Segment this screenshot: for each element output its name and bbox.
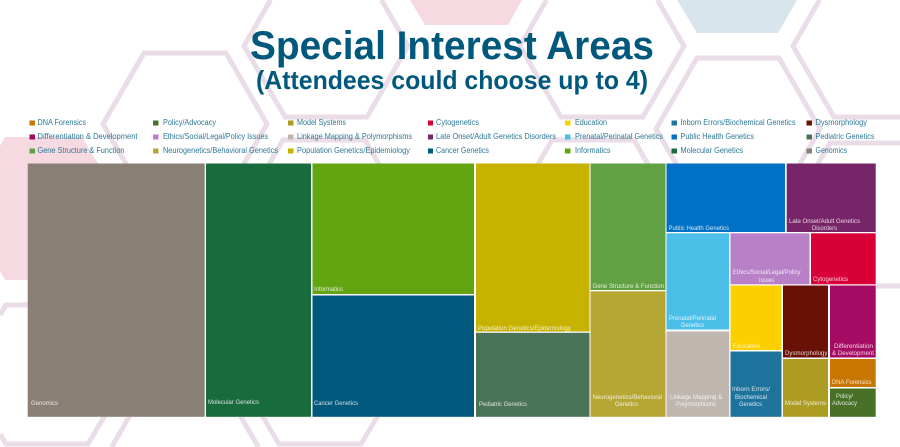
cell: Cancer Genetics xyxy=(312,296,474,417)
legend: Population Genetics/Epidemiology xyxy=(297,146,410,155)
legend xyxy=(30,118,875,155)
cell: Population Genetics/Epidemiology xyxy=(476,164,590,332)
cell: Informatics: Informatics xyxy=(314,286,344,293)
treemap chart xyxy=(28,164,876,417)
cell: Inborn Errors/Biochemical Genetics: Biochemical xyxy=(735,394,768,401)
cell: Inborn Errors/Biochemical Genetics xyxy=(730,352,782,417)
cell: Ethics/Social/Legal/Policy Issues: Issues xyxy=(759,277,775,284)
legend: Policy/Advocacy xyxy=(163,118,216,127)
cell: Linkage Mapping & Polymorphisms xyxy=(666,332,729,417)
cell: Policy/Advocacy: Policy/ xyxy=(836,393,853,400)
subtitle: (Attendees could choose up to 4) xyxy=(256,65,648,95)
cell: Genomics xyxy=(28,164,205,417)
cell: Late Onset/Adult Genetics Disorders xyxy=(787,164,876,232)
cell: Inborn Errors/Biochemical Genetics: Inborn Errors/ xyxy=(732,386,770,393)
legend: Differentiation & Development xyxy=(38,132,138,141)
legend: Gene Structure & Function xyxy=(38,146,124,155)
cell: Public Health Genetics xyxy=(666,164,785,232)
cell: Model Systems: Model Systems xyxy=(785,400,827,407)
cell: Cancer Genetics: Cancer Genetics xyxy=(314,400,359,407)
cell: Genomics: Genomics xyxy=(31,400,59,407)
cell: Cytogenetics: Cytogenetics xyxy=(813,276,849,283)
cell: Molecular Genetics xyxy=(206,164,311,417)
cell: Neurogenetics/Behavioral Genetics: Genetics xyxy=(615,401,639,408)
legend: Public Health Genetics xyxy=(680,132,754,141)
cell: Public Health Genetics: Public Health Genetics xyxy=(668,225,730,232)
cell: Differentiation & Development: & Development xyxy=(832,350,874,357)
cell: Cytogenetics xyxy=(811,233,876,284)
legend: Prenatal/Perinatal Genetics xyxy=(575,132,663,141)
cell: Linkage Mapping & Polymorphisms: Linkage Mapping & xyxy=(670,394,723,401)
cell: Differentiation & Development: Differentiation xyxy=(834,343,873,350)
cell: Gene Structure & Function: Gene Structure & Function xyxy=(592,283,664,290)
cell: Population Genetics/Epidemiology: Population Genetics/Epidemiology xyxy=(478,325,572,332)
cell: DNA Forensics xyxy=(830,359,876,387)
cell: Neurogenetics/Behavioral Genetics xyxy=(590,291,666,417)
cell: Education xyxy=(730,286,782,350)
cell: Ethics/Social/Legal/Policy Issues xyxy=(730,233,810,284)
cell: Informatics xyxy=(312,164,474,294)
cell: Late Onset/Adult Genetics Disorders: Late Onset/Adult Genetics xyxy=(789,218,861,225)
legend: Neurogenetics/Behavioral Genetics xyxy=(163,146,278,155)
cell: Dysmorphology: Dysmorphology xyxy=(785,350,828,357)
cell: Education: Education xyxy=(733,343,760,350)
cell: Dysmorphology xyxy=(783,286,828,358)
cell: Prenatal/Perinatal Genetics: Prenatal/Perinatal xyxy=(669,315,717,322)
legend: Education xyxy=(575,118,607,127)
cell: Neurogenetics/Behavioral Genetics: Neurogenetics/Behavioral xyxy=(592,394,663,401)
cell: Differentiation & Development xyxy=(830,286,876,358)
legend: DNA Forensics xyxy=(38,118,86,127)
cell: Pediatric Genetics: Pediatric Genetics xyxy=(479,401,528,408)
cell: Gene Structure & Function xyxy=(590,164,666,290)
legend: Model Systems xyxy=(297,118,346,127)
cell: Inborn Errors/Biochemical Genetics: Genetics xyxy=(739,401,763,408)
cell: Prenatal/Perinatal Genetics: Genetics xyxy=(681,322,705,329)
legend: Informatics xyxy=(575,146,611,155)
cell: Model Systems xyxy=(783,359,828,417)
legend: Cancer Genetics xyxy=(436,146,489,155)
legend: Late Onset/Adult Genetics Disorders xyxy=(436,132,556,141)
cell: Policy/Advocacy: Advocacy xyxy=(832,400,858,407)
legend: Ethics/Social/Legal/Policy Issues xyxy=(163,132,268,141)
title: Special Interest Areas xyxy=(250,24,654,68)
cell: Prenatal/Perinatal Genetics xyxy=(666,233,729,330)
cell: Molecular Genetics: Molecular Genetics xyxy=(208,399,260,406)
cell: Policy/Advocacy xyxy=(830,388,876,417)
legend: Dysmorphology xyxy=(816,118,867,127)
legend: Pediatric Genetics xyxy=(816,132,875,141)
legend: Genomics xyxy=(816,146,847,155)
cell: Linkage Mapping & Polymorphisms: Polymorphisms xyxy=(676,401,717,408)
legend: Inborn Errors/Biochemical Genetics xyxy=(680,118,796,127)
cell: DNA Forensics: DNA Forensics xyxy=(832,379,872,386)
cell: Late Onset/Adult Genetics Disorders: Disorders xyxy=(812,225,838,232)
legend: Linkage Mapping & Polymorphisms xyxy=(297,132,412,141)
legend: Cytogenetics xyxy=(436,118,479,127)
legend: Molecular Genetics xyxy=(680,146,743,155)
cell: Pediatric Genetics xyxy=(476,333,590,417)
cell: Ethics/Social/Legal/Policy Issues: Ethics/Social/Legal/Policy xyxy=(733,269,801,276)
